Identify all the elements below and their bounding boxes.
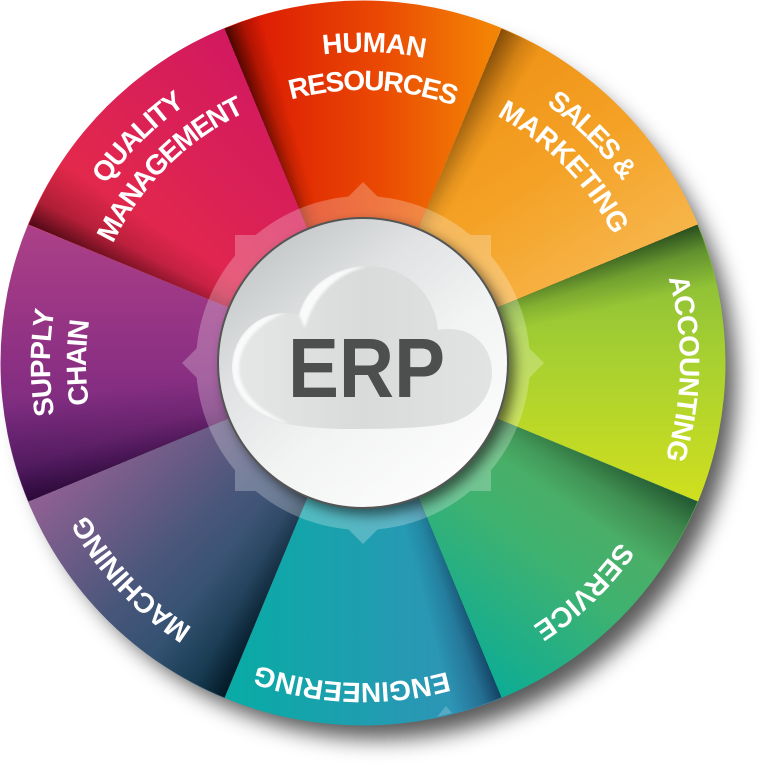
label: supply chain: CHAIN bbox=[66, 320, 89, 404]
centre disc bbox=[218, 218, 508, 508]
label: quality management: QUALITY bbox=[94, 90, 180, 180]
hub shadow bbox=[223, 223, 515, 515]
label: sales and marketing: SALES & bbox=[549, 92, 634, 180]
segment: sales and marketing bbox=[418, 28, 698, 307]
label: machining: MACHINING bbox=[74, 517, 191, 643]
segment: machining bbox=[28, 419, 307, 698]
gear ring bbox=[182, 182, 544, 544]
label: human resources: HUMAN bbox=[323, 32, 426, 58]
label: supply chain bbox=[30, 308, 89, 416]
label: human resources bbox=[288, 32, 458, 104]
label: quality management: MANAGEMENT bbox=[96, 95, 240, 242]
segment: human resources bbox=[224, 0, 502, 228]
label: human resources: RESOURCES bbox=[288, 70, 458, 104]
centre hub and labels bbox=[30, 32, 700, 717]
title: ERP: ERP bbox=[288, 321, 445, 415]
label: accounting: ACCOUNTING bbox=[667, 278, 700, 461]
segment: supply chain bbox=[0, 224, 228, 502]
label: supply chain: SUPPLY bbox=[30, 308, 54, 416]
label: sales and marketing: MARKETING bbox=[498, 100, 627, 232]
segment: quality management bbox=[28, 28, 307, 308]
label: engineering: ENGINEERING bbox=[254, 667, 450, 702]
icon: cloud bbox=[232, 266, 492, 429]
segment: accounting bbox=[498, 224, 726, 502]
segment: service bbox=[419, 419, 698, 698]
segment: engineering bbox=[224, 498, 502, 726]
label: service: SERVICE bbox=[534, 544, 633, 642]
